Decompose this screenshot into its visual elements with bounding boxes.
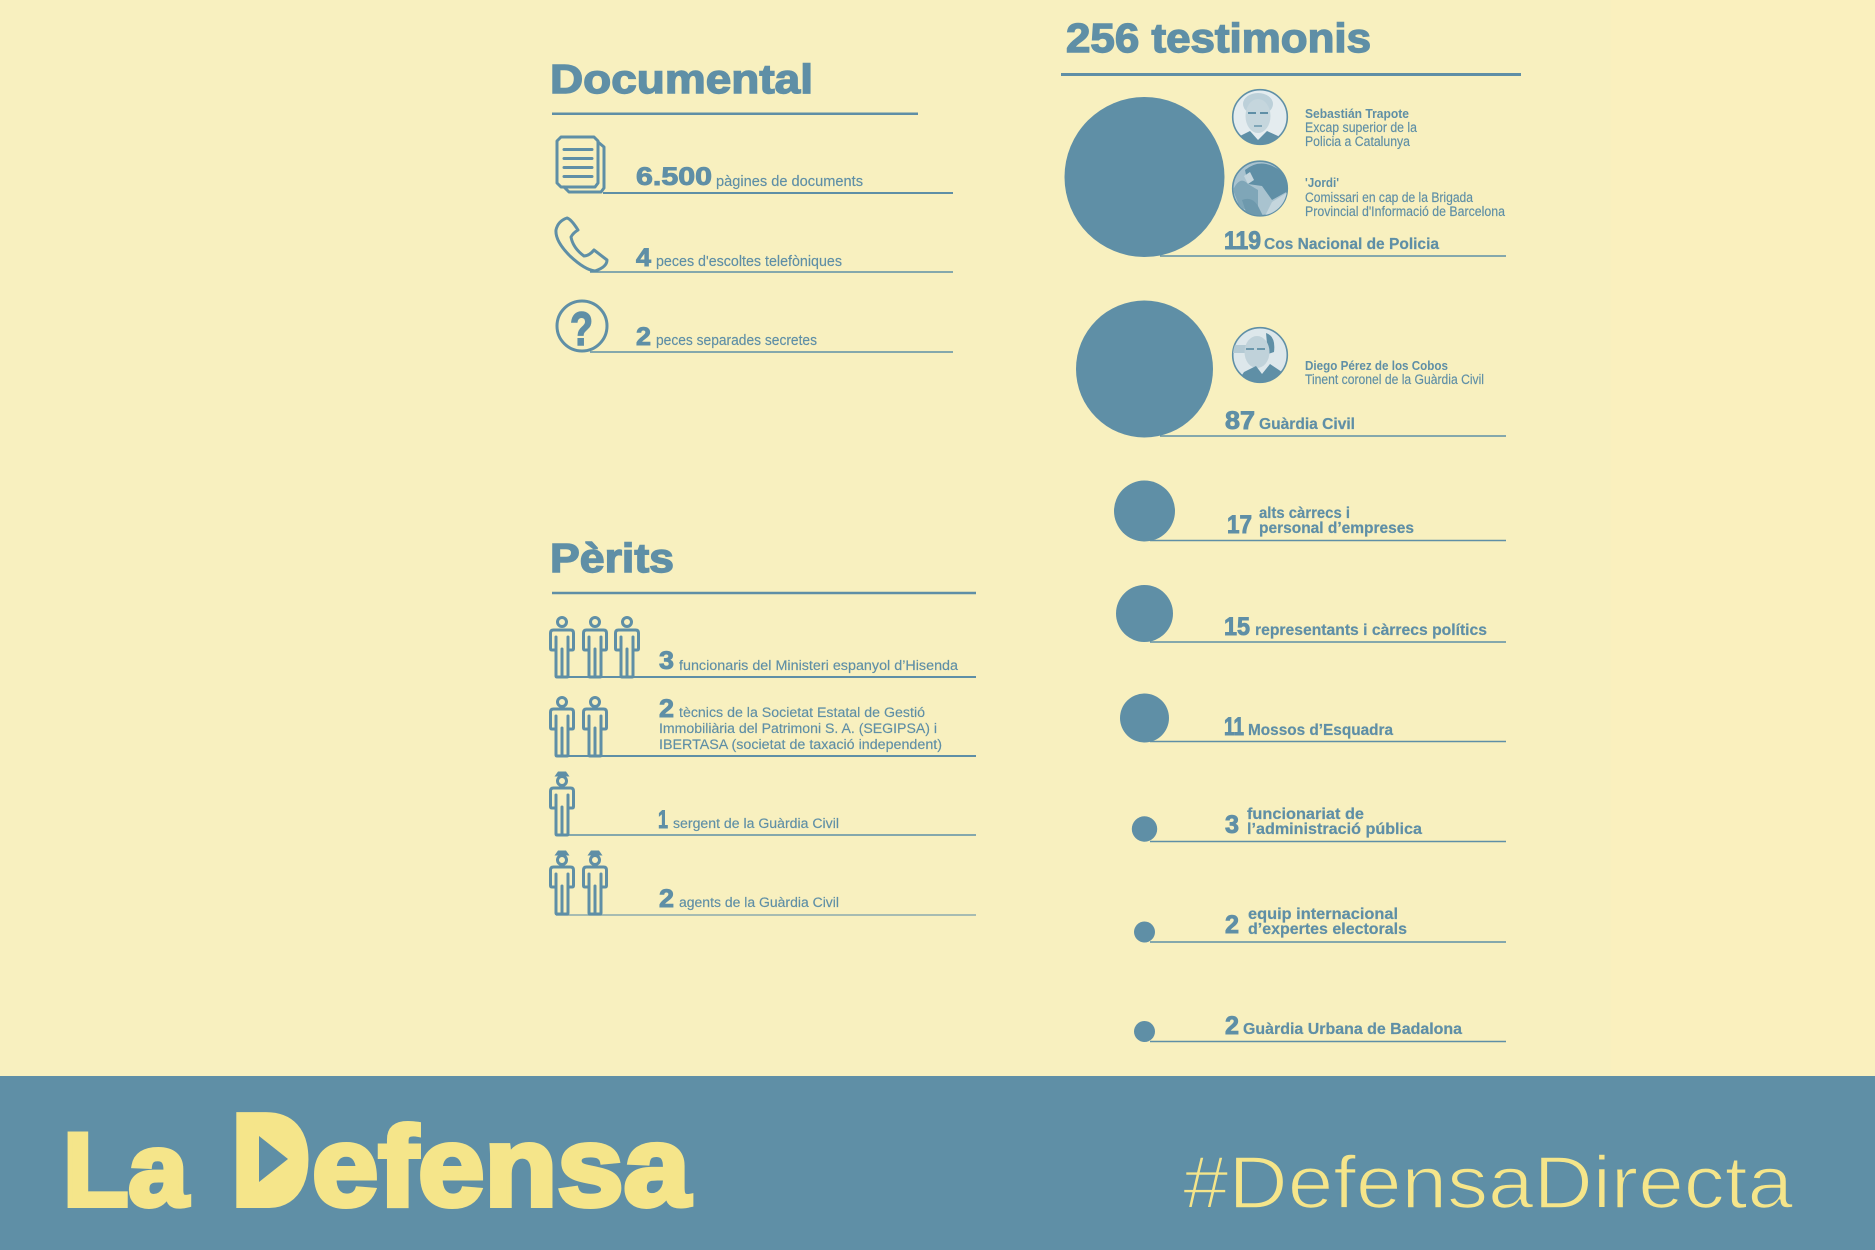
row: 2 agents: agents de la Guàrdia Civil: [679, 895, 839, 910]
icon: question mark: ?: [570, 302, 593, 355]
row: Guardia Urbana: Guàrdia Urbana de Badalona: [1243, 1021, 1462, 1038]
row: 2 tecnics: IBERTASA (societat de taxació independent): [659, 737, 942, 752]
row: pages of documents: 6.500: [636, 163, 712, 191]
row: phone taps: peces d'escoltes telefòniques: [656, 254, 842, 270]
row: Guardia Civil: [1076, 300, 1506, 438]
icon: question mark: [557, 301, 607, 355]
panel: 256 testimonis: [1061, 15, 1521, 1042]
row: equip internacional: 2: [1225, 911, 1239, 939]
caption: Diego Perez de los Cobos: Diego Pérez de los Cobos: [1305, 358, 1448, 373]
row: Mossos: [1120, 694, 1506, 742]
icon: documents: [557, 137, 604, 192]
row: secret pieces: peces separades secretes: [656, 333, 817, 349]
row: 3 funcionaris: [550, 618, 976, 677]
photo: Diego Perez de los Cobos: [1232, 328, 1288, 384]
bubble: 15: [1116, 585, 1173, 642]
row: 1 sergent: sergent de la Guàrdia Civil: [673, 816, 839, 831]
row: Cos Nacional de Policia: 119: [1224, 227, 1261, 255]
row: alts carrecs: alts càrrecs i: [1259, 505, 1350, 522]
row: Mossos: 11: [1224, 713, 1244, 741]
photo: Sebastian Trapote: [1233, 90, 1287, 146]
bubble: 2: [1134, 922, 1155, 942]
row: pages of documents: [557, 137, 953, 193]
row: alts carrecs: 17: [1227, 511, 1252, 539]
caption: Jordi: Comissari en cap de la Brigada: [1305, 190, 1473, 205]
caption: Sebastian Trapote: Sebastián Trapote: [1305, 106, 1409, 121]
row: 2 tecnics: 2: [659, 695, 674, 723]
row: 2 agents: 2: [659, 885, 674, 913]
row: funcionariat: 3: [1225, 811, 1239, 839]
row: equip internacional: equip internacional: [1248, 906, 1398, 923]
row: Cos Nacional de Policia: [1064, 90, 1506, 257]
heading: Documental: Documental: [550, 56, 813, 102]
row: representants: 15: [1224, 613, 1250, 641]
row: 1 sergent: [550, 772, 976, 835]
bubble: 11: [1120, 694, 1169, 742]
row: 2 tecnics: Immobiliària del Patrimoni S. A. (SEGIPSA) i: [659, 721, 937, 736]
row: 3 funcionaris: 3: [659, 647, 674, 675]
row: Guardia Urbana: [1134, 1012, 1506, 1042]
caption: Diego Perez de los Cobos: [1305, 358, 1484, 387]
icon: phone: [556, 218, 607, 271]
logo: La Defensa: [63, 1086, 691, 1234]
hashtag: #DefensaDirecta: [1183, 1141, 1794, 1224]
row: 2 tecnics: [550, 695, 976, 756]
bubble: 119: [1064, 97, 1224, 257]
row: phone taps: 4: [636, 244, 651, 272]
caption: Jordi: Provincial d'Informació de Barcelona: [1305, 204, 1505, 219]
icon: person with hat: [550, 772, 574, 835]
row: 2 tecnics: tècnics de la Societat Estatal de Gestió: [679, 705, 925, 720]
row: equip internacional: d’expertes electorals: [1248, 921, 1407, 938]
row: Guardia Urbana: 2: [1225, 1012, 1239, 1040]
logo: La Defensa: La: [63, 1112, 189, 1228]
row: funcionariat: [1132, 806, 1506, 842]
caption: Diego Perez de los Cobos: Tinent coronel de la Guàrdia Civil: [1305, 372, 1484, 387]
bubble: 87: [1076, 300, 1213, 438]
row: 3 funcionaris: funcionaris del Ministeri espanyol d’Hisenda: [679, 658, 959, 673]
row: Mossos: Mossos d’Esquadra: [1248, 722, 1393, 739]
heading: 256 testimonis: 256 testimonis: [1066, 15, 1371, 61]
row: funcionariat: funcionariat de: [1247, 806, 1364, 823]
logo: La Defensa: D: [231, 1086, 311, 1234]
row: alts carrecs: personal d’empreses: [1259, 520, 1414, 537]
icon: three persons: [550, 618, 638, 677]
caption: Sebastian Trapote: [1305, 106, 1417, 149]
row: alts carrecs: [1114, 480, 1506, 542]
icon: two persons with hats: [550, 850, 606, 914]
row: 2 agents: [550, 850, 976, 915]
row: Guardia Civil: 87: [1225, 407, 1255, 435]
panel: Perits: [550, 535, 976, 915]
row: Guardia Civil: Guàrdia Civil: [1259, 416, 1355, 433]
caption: Jordi: 'Jordi': [1305, 175, 1339, 190]
caption: Sebastian Trapote: Excap superior de la: [1305, 120, 1417, 135]
row: pages of documents: pàgines de documents: [716, 174, 863, 190]
icon: two persons: [550, 698, 606, 756]
row: representants: representants i càrrecs polítics: [1255, 622, 1487, 639]
row: 1 sergent: 1: [658, 806, 668, 834]
row: equip internacional: [1134, 906, 1506, 942]
caption: Jordi: [1305, 175, 1505, 219]
bubble: 3: [1132, 816, 1157, 842]
footer band: [0, 1076, 1875, 1250]
logo: La Defensa: efensa: [312, 1104, 691, 1230]
photo: Jordi: [1233, 161, 1290, 218]
heading: Perits: Pèrits: [550, 535, 674, 581]
bubble: 17: [1114, 480, 1175, 542]
caption: Sebastian Trapote: Policia a Catalunya: [1305, 134, 1410, 149]
row: representants: [1116, 585, 1506, 642]
row: funcionariat: l’administració pública: [1247, 821, 1422, 838]
row: secret pieces: 2: [636, 323, 651, 351]
row: phone taps: [556, 218, 953, 272]
row: Cos Nacional de Policia: Cos Nacional de Policia: [1264, 236, 1439, 253]
bubble: 2: [1134, 1021, 1155, 1042]
panel: Documental: [550, 56, 953, 355]
row: secret pieces: [557, 301, 953, 355]
